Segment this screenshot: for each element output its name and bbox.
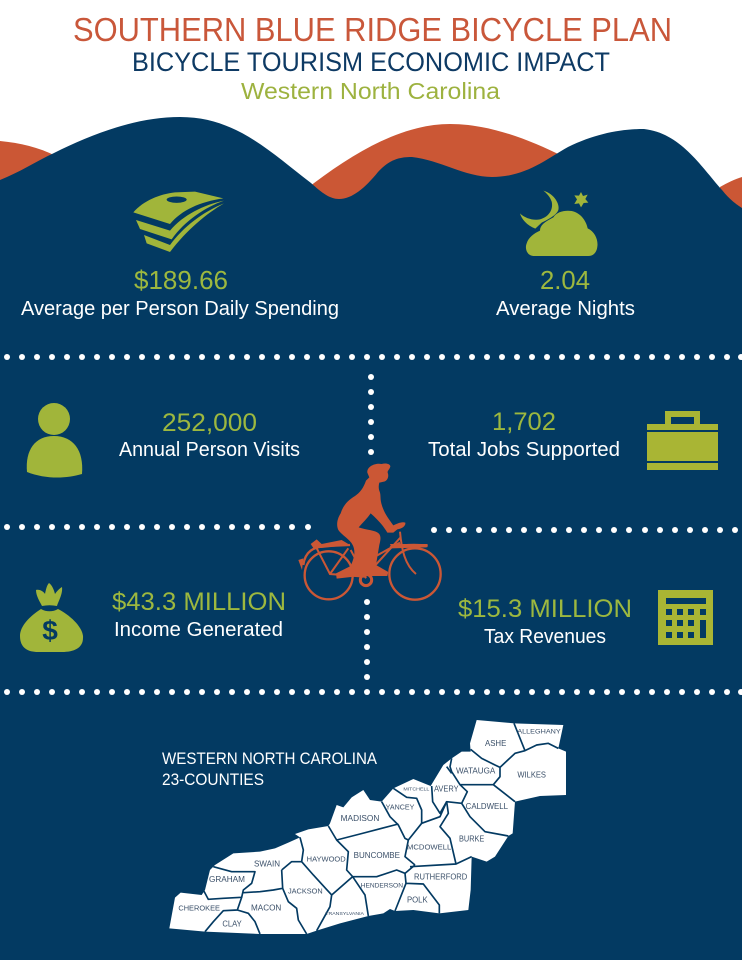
stat: jobs label: Total Jobs Supported xyxy=(428,439,620,461)
county map: HENDERSON xyxy=(361,882,403,889)
county map: WATAUGA xyxy=(456,767,496,776)
county map: ASHE xyxy=(485,739,506,748)
county map: CHEROKEE xyxy=(178,903,220,912)
stat: average nights value: 2.04 xyxy=(540,265,590,295)
dotted dividers xyxy=(4,354,742,695)
stat: annual visits label: Annual Person Visits xyxy=(119,439,300,461)
icon: money bag xyxy=(20,583,83,652)
stat: income value: $43.3 MILLION xyxy=(112,588,286,616)
stat: income label: Income Generated xyxy=(114,619,283,641)
map heading: WESTERN NORTH CAROLINA xyxy=(162,750,377,768)
county map: WILKES xyxy=(517,770,546,779)
stat: tax value: $15.3 MILLION xyxy=(458,595,632,623)
county map: MITCHELL xyxy=(403,787,430,793)
title: SOUTHERN BLUE RIDGE BICYCLE PLAN xyxy=(73,12,672,49)
county map: BURKE xyxy=(459,834,484,843)
map subheading: 23-COUNTIES xyxy=(162,771,264,789)
county map: AVERY xyxy=(434,784,459,793)
county map: GRAHAM xyxy=(209,875,245,884)
stat: jobs value: 1,702 xyxy=(492,408,556,436)
icon: moon and cloud xyxy=(520,191,598,256)
county map: JACKSON xyxy=(288,887,323,896)
county map: SWAIN xyxy=(254,859,280,868)
subtitle: BICYCLE TOURISM ECONOMIC IMPACT xyxy=(132,47,610,77)
county map: YANCEY xyxy=(386,803,414,812)
county map: POLK xyxy=(407,895,428,904)
region heading: Western North Carolina xyxy=(241,78,500,104)
county map: TRANSYLVANIA xyxy=(325,911,365,917)
county map: CALDWELL xyxy=(466,802,509,811)
county map: MACON xyxy=(251,903,282,912)
icon: cyclist on bicycle xyxy=(298,463,441,600)
stat: annual visits value: 252,000 xyxy=(162,409,257,437)
icon: briefcase xyxy=(647,411,718,470)
county map: HAYWOOD xyxy=(307,854,346,863)
icon: person xyxy=(27,403,82,478)
county map: MADISON xyxy=(341,814,380,823)
stat: tax label: Tax Revenues xyxy=(484,626,606,648)
county map: CLAY xyxy=(222,920,242,929)
icon: stack of money xyxy=(133,192,224,252)
stat: average nights label: Average Nights xyxy=(496,298,635,320)
icon: money bag: $ xyxy=(42,615,58,646)
stat: daily spending value: $189.66 xyxy=(134,265,228,295)
county map: ALLEGHANY xyxy=(517,728,562,735)
orange mountains xyxy=(0,124,742,215)
stat: daily spending label: Average per Person Daily Spending xyxy=(21,298,339,320)
icon: calculator xyxy=(658,590,713,645)
county map: RUTHERFORD xyxy=(414,873,468,882)
county map xyxy=(169,720,566,934)
county map: BUNCOMBE xyxy=(354,851,400,860)
county map: MCDOWELL xyxy=(407,842,451,851)
